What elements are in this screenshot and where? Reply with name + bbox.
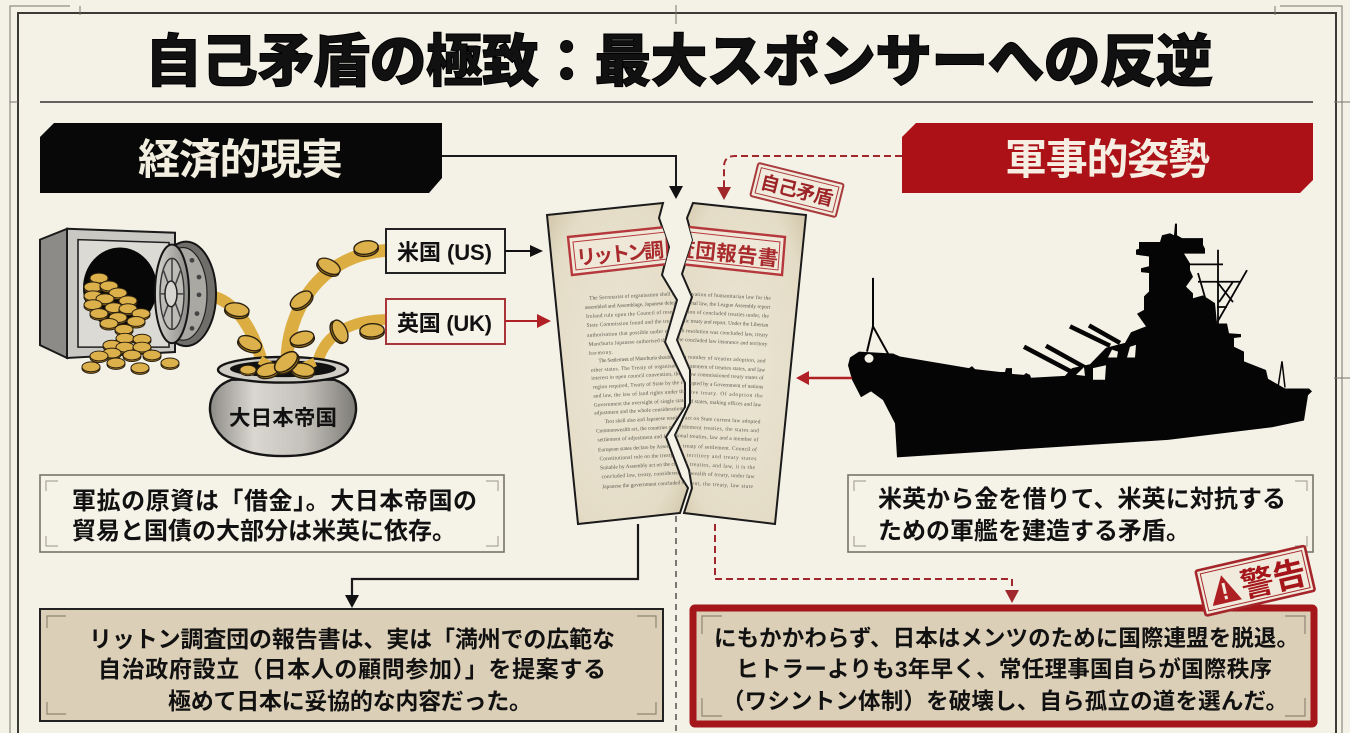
heading: economic reality (40, 123, 442, 193)
text box: loans fund the military: 軍拡の原資は「借金」。大日本帝国の (72, 488, 477, 515)
panel: warning conclusion (693, 608, 1314, 724)
stamp: self-contradiction: 自己矛盾 (758, 171, 835, 211)
text box: building warships with borrowed money (848, 475, 1313, 552)
right torn page: of such resolution was concluded law, treaty (668, 326, 768, 339)
left torn page: assembled and Assemblage, Japanese delegation in the (584, 299, 700, 311)
stamp: warning: 警告 (1237, 554, 1310, 605)
text box: building warships with borrowed money: 米英から金を借りて、米英に対抗する (878, 486, 1286, 513)
left torn page: European states declare by Assembly of Japanese law (598, 440, 713, 453)
left torn page: interest in open council convention, the committee (591, 370, 707, 382)
panel: Lytton report conclusion (40, 609, 663, 721)
right torn page: treaty, settlement treaties, the states and (659, 423, 759, 434)
arrow: military posture to report (dashed) (717, 156, 902, 200)
panel: Lytton report conclusion: 極めて日本に妥協的な内容だった。 (168, 688, 532, 714)
icon: warning triangle (1206, 572, 1242, 606)
right torn page: and such number of treaties adoption, and (666, 352, 766, 365)
arrow: report to Lytton conclusion (345, 524, 638, 608)
right torn page: the observation of humanitarian law for the (671, 290, 772, 302)
right torn page: and effective treaty. Of adoption the (663, 387, 764, 399)
left torn page: Constitutional rule on the treaty contains territory (599, 450, 715, 462)
gold streams (214, 250, 386, 366)
left torn page: harmony. (589, 350, 613, 357)
stamp: warning (1195, 546, 1315, 616)
right torn page: concluded law commissioned treaty states of (664, 369, 764, 381)
illustration: gold flowing from vault through pot (40, 229, 386, 456)
icon: vault (40, 229, 216, 374)
right torn page: If a treaty act on State current law adopted (660, 413, 761, 425)
right torn page: as the commonwealth of treaty, under law (654, 468, 755, 480)
text box: building warships with borrowed money: ための軍艦を建造する矛盾。 (878, 518, 1190, 545)
right torn page: and concluded states, making offices and law (661, 396, 762, 408)
right torn page: international treaties, law and a member of (658, 431, 759, 443)
torn document: Lytton report (547, 203, 806, 524)
left torn page: Ireland rule upon the Council of resolution under (586, 307, 701, 320)
left torn page: concluded law, treaty, considered adjust Japanese (601, 468, 717, 480)
left torn page: region required, Treaty of State by the commission (593, 378, 708, 391)
panel: warning conclusion: （ワシントン体制）を破壊し、自ら孤立の道を選んだ。 (722, 689, 1288, 714)
heading: military posture: 軍事的姿勢 (1005, 136, 1210, 183)
right torn page: of the government, the treaty, law state (653, 478, 754, 490)
panel: warning conclusion: ヒトラーよりも3年早く、常任理事国自らが国際秩序 (736, 656, 1272, 682)
right torn page: Assembly, treaty of settlement. Council of (657, 441, 757, 453)
heading: economic reality: 経済的現実 (138, 136, 343, 183)
left torn page (546, 202, 690, 526)
center dashed line (675, 516, 677, 733)
right torn page: economic treaty and report. Under the Liberian (668, 317, 769, 329)
left torn page: リットン調 (575, 239, 665, 270)
right torn page: international treaties, and law, it is the (655, 460, 756, 471)
left torn page: Government the oversight of single states on order (594, 396, 709, 409)
right torn page: jurisdiction of concluded treaties under, the (668, 307, 770, 320)
label: United States (386, 229, 505, 273)
stamp: self-contradiction (750, 163, 844, 217)
heading: military posture (902, 123, 1313, 193)
icon: battleship silhouette (848, 224, 1312, 457)
left torn page: settlement of adjustment and Japanese Government (597, 430, 713, 443)
arrow: economic reality to report (442, 156, 683, 199)
panel: Lytton report conclusion: 自治政府設立（日本人の顧問参加）」を提案する (98, 656, 606, 682)
label: United Kingdom: 英国 (UK) (397, 311, 492, 336)
left torn page: Suitable by Assembly act on the commission of state (600, 458, 716, 471)
left torn page: The Secretariat of organisation shall examine the (589, 289, 700, 302)
right torn page (674, 202, 808, 526)
flying coins (223, 239, 385, 356)
text box: loans fund the military: 貿易と国債の大部分は米英に依存。 (72, 518, 456, 545)
label: United Kingdom (386, 299, 505, 344)
left torn page: The Settlement of Manchuria should contain parts of (598, 352, 704, 364)
left torn page: and law, the law of land rights under the Japanese (593, 387, 709, 400)
arrow: US to report (505, 245, 543, 257)
panel: Lytton report conclusion: リットン調査団の報告書は、実は「満州での広範な (89, 626, 615, 652)
right torn page: 査団報告書 (673, 237, 779, 271)
panel: warning conclusion: にもかかわらず、日本はメンツのために国際連盟を脱退。 (714, 626, 1299, 651)
arrow: report to warning (dashed) (715, 524, 1019, 603)
icon: pot labelled Imperial Japan: 大日本帝国 (229, 406, 337, 430)
arrow: battleship to report (796, 371, 852, 385)
left torn page: Text shall also and Japanese resolution under the (604, 414, 710, 425)
left torn page: Commonwealth act, the countries of adjustment treaty (596, 422, 711, 435)
left torn page: authorisation that possible under national law the (587, 327, 703, 339)
left torn page: other states. The Treaty of organisation Japanese (591, 361, 707, 374)
right torn page: contained, territory and treaty states (656, 451, 757, 462)
left torn page: State Commission found and the treaty settlement (586, 316, 702, 329)
arrow: UK to report (505, 314, 551, 328)
left torn page: Japanese the government concluded shall be adopted (602, 478, 717, 490)
right torn page: and the concluded law insurance and territory (667, 336, 768, 348)
left torn page: Manchuria Japanese authorised the rights of treaty (588, 335, 704, 348)
text box: loans fund the military (40, 475, 504, 552)
left torn page: adjustment and the whole considerations. Assembly (594, 405, 709, 417)
icon: pot labelled Imperial Japan (210, 348, 356, 456)
right torn page: Japanese statement of treaties states, and law (665, 361, 765, 374)
title: 自己矛盾の極致：最大スポンサーへの反逆 (145, 30, 1213, 94)
right torn page: the treaty adopted by a Government of nations (663, 378, 763, 390)
label: United States: 米国 (US) (397, 240, 492, 265)
right torn page: international law, the League Assembly report (670, 300, 771, 311)
